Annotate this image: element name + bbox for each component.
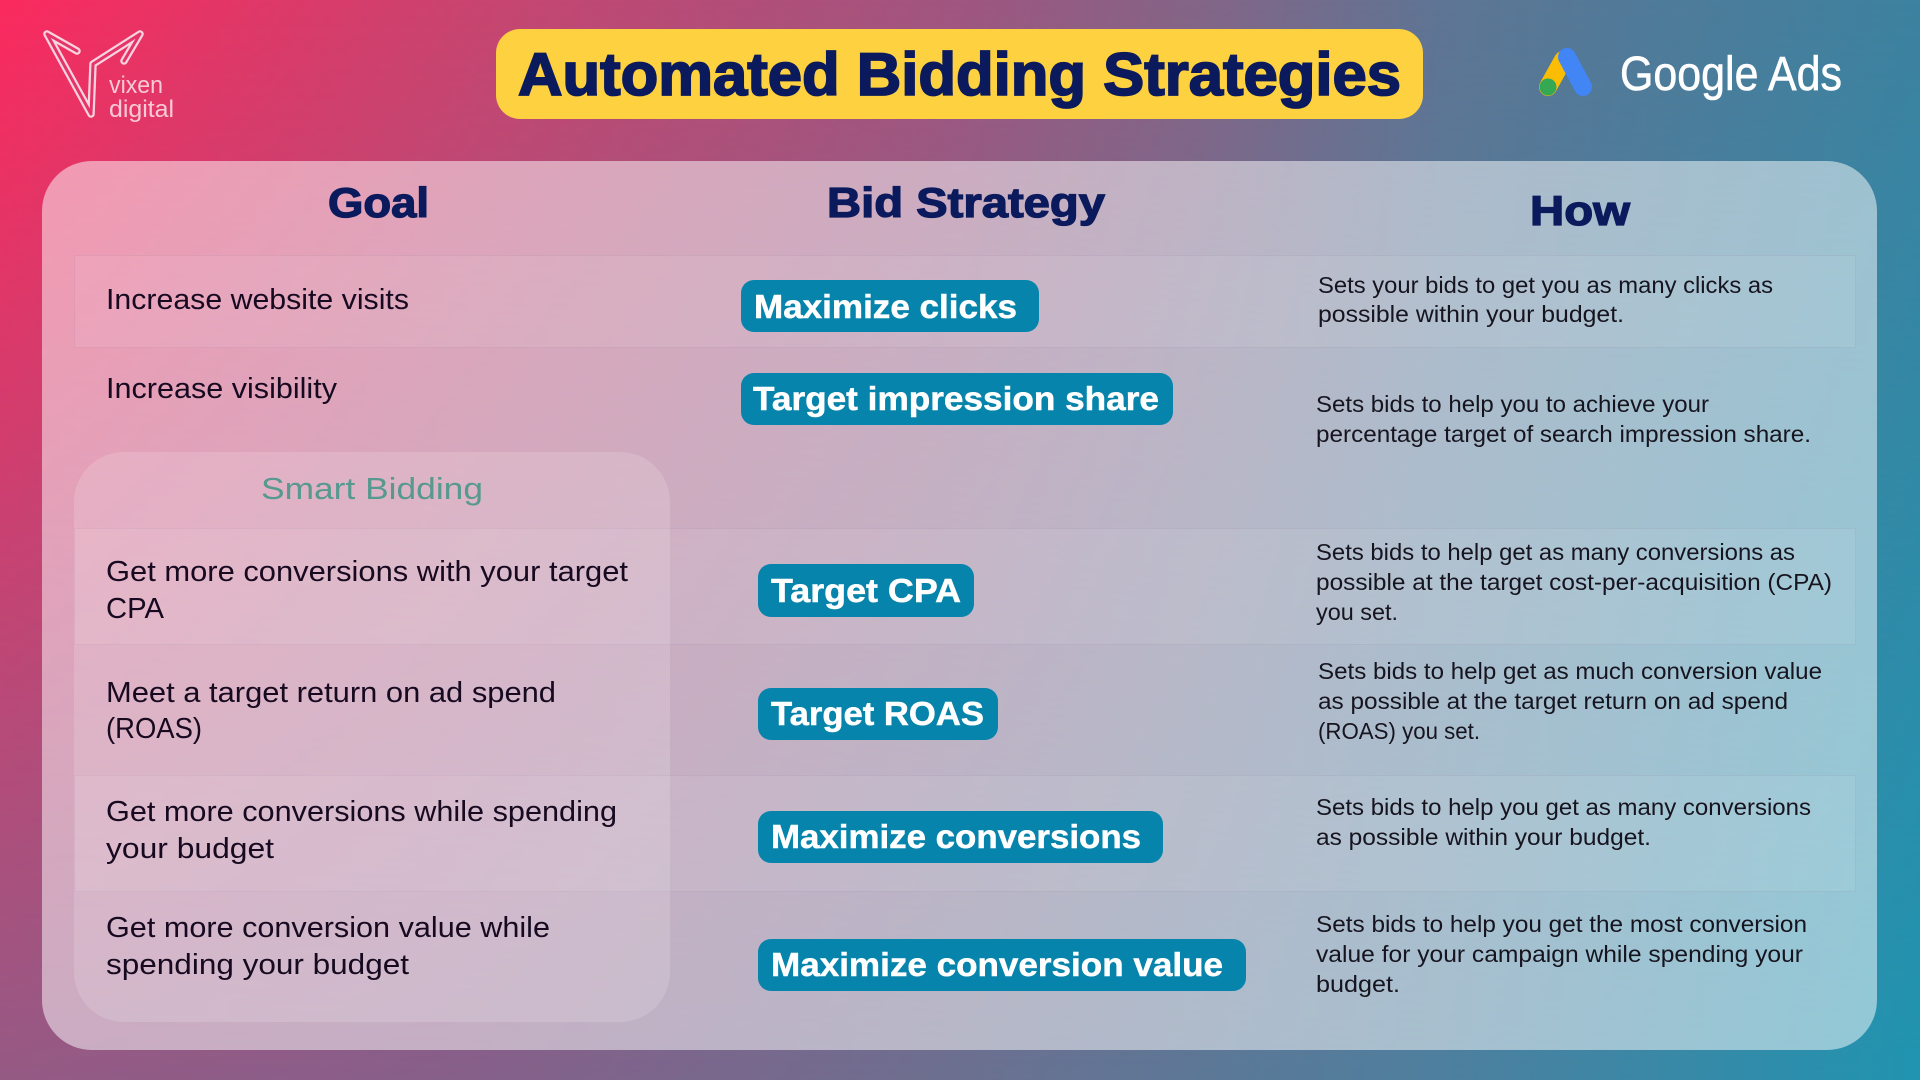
how: Target impression share: [1316, 391, 1811, 447]
icon: vixen V mark: [47, 34, 140, 114]
how: Target ROAS: (ROAS) you set.: [1318, 718, 1480, 744]
goal: conversion value: spending your budget: [106, 949, 409, 981]
title: Automated Bidding Strategies: [518, 41, 1401, 108]
how: Maximize clicks: possible within your budget.: [1318, 301, 1624, 327]
how: Target CPA: Sets bids to help get as many conversions as: [1316, 539, 1795, 565]
heading: How: How: [1530, 187, 1630, 234]
how: Maximize conversions: as possible within your budget.: [1316, 824, 1651, 850]
how: Maximize conversions: [1316, 794, 1811, 850]
how: Maximize clicks: Sets your bids to get you as many clicks as: [1318, 272, 1773, 298]
goal: ROAS: Meet a target return on ad spend: [106, 677, 556, 709]
logo text: vixen: [109, 72, 163, 99]
goal: conversions: your budget: [106, 833, 274, 865]
bid strategy pills: [741, 280, 1246, 991]
goal: ROAS: [106, 677, 556, 745]
how: Maximize conversions: Sets bids to help you get as many conversions: [1316, 794, 1811, 820]
how: Target ROAS: Sets bids to help get as much conversion value: [1318, 658, 1822, 684]
goal: visibility: Increase visibility: [106, 373, 338, 405]
how: Maximize conversion value: budget.: [1316, 971, 1400, 997]
how: Target CPA: you set.: [1316, 599, 1398, 625]
how: Maximize conversion value: Sets bids to help you get the most conversion: [1316, 911, 1807, 937]
how: Target impression share: Sets bids to help you to achieve your: [1316, 391, 1709, 417]
pill: Maximize conversions: Maximize conversions: [771, 818, 1141, 855]
pill: Maximize conversion value: Maximize conversion value: [771, 946, 1223, 983]
how: Maximize clicks: [1318, 272, 1773, 327]
how: Maximize conversion value: value for your campaign while spending your: [1316, 941, 1803, 967]
goal column: [106, 284, 628, 981]
smart bidding label: Smart Bidding: [261, 471, 483, 506]
icon: Google Ads triangle: [1540, 57, 1583, 96]
pill: Maximize conversion value: [758, 939, 1246, 991]
logo text: digital: [109, 96, 174, 123]
how: Target ROAS: as possible at the target return on ad spend: [1318, 688, 1788, 714]
logo: vixen digital: [47, 34, 174, 123]
how: Target CPA: possible at the target cost-per-acquisition (CPA): [1316, 569, 1832, 595]
title: [496, 29, 1423, 119]
goal: ROAS: (ROAS): [106, 713, 202, 745]
goal: conversion value: Get more conversion value while: [106, 912, 550, 944]
pill: Target impression share: [741, 373, 1173, 425]
logo text: [109, 72, 174, 123]
goal: target CPA: CPA: [106, 593, 164, 625]
pill: Maximize clicks: [741, 280, 1039, 332]
pill: Target ROAS: [758, 688, 998, 740]
pill: Target impression share: Target impression share: [753, 380, 1159, 417]
panel: smart bidding group: [74, 452, 670, 1022]
row backgrounds: [74, 256, 1856, 892]
goal: conversions: [106, 796, 617, 865]
panel: table: [42, 161, 1877, 1050]
heading: Bid Strategy: Bid Strategy: [827, 179, 1106, 226]
how column: [1316, 272, 1832, 997]
how: Maximize conversion value: [1316, 911, 1807, 997]
pill: Target CPA: Target CPA: [771, 572, 961, 609]
pill: Maximize clicks: Maximize clicks: [754, 288, 1017, 325]
goal: target CPA: [106, 556, 628, 625]
goal: website visits: Increase website visits: [106, 284, 409, 316]
Google Ads wordmark: Google Ads: [1620, 48, 1842, 101]
logo: Google Ads: [1540, 48, 1842, 101]
goal: conversions: Get more conversions while spending: [106, 796, 617, 828]
pill: Target ROAS: Target ROAS: [771, 695, 984, 732]
how: Target ROAS: [1318, 658, 1822, 744]
pill: Target CPA: [758, 564, 974, 617]
pill: Maximize conversions: [758, 811, 1163, 863]
heading: Goal: Goal: [328, 179, 429, 226]
how: Target impression share: percentage target of search impression share.: [1316, 421, 1811, 447]
goal: conversion value: [106, 912, 550, 981]
goal: target CPA: Get more conversions with your target: [106, 556, 628, 588]
how: Target CPA: [1316, 539, 1832, 625]
